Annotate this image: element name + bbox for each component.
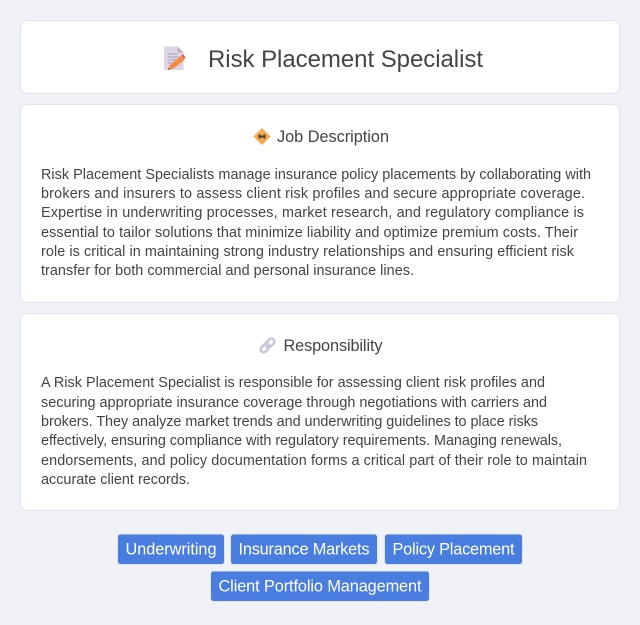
tag: Client Portfolio Management xyxy=(210,571,430,602)
heading: responsibility: Responsibility xyxy=(284,337,383,355)
icon: diamond sign xyxy=(254,128,270,145)
tag: Underwriting xyxy=(118,534,224,564)
text block: responsibility: endorsements, and policy documentation forms a critical part of their role to maintain xyxy=(41,453,587,469)
tag: Insurance Markets: Insurance Markets xyxy=(238,540,370,558)
text block: responsibility xyxy=(41,375,587,488)
text block: job description: essential to tailor solutions that minimize liability and optimize premium costs. Their xyxy=(41,225,578,241)
text block: responsibility: A Risk Placement Specialist is responsible for assessing client risk profiles and xyxy=(41,375,545,391)
panel: responsibility xyxy=(20,314,620,510)
panel: title card xyxy=(20,20,620,94)
text block: job description: Risk Placement Specialists manage insurance policy placements by collaborating with xyxy=(41,167,591,183)
text block: job description xyxy=(41,167,591,279)
text block: responsibility: effectively, ensuring compliance with regulatory requirements. Managing renewals, xyxy=(41,433,562,449)
tag: Insurance Markets xyxy=(230,534,378,564)
text block: job description: brokers and insurers to assess client risk profiles and secure appropriate coverage. xyxy=(41,186,585,202)
text block: responsibility: brokers. They analyze market trends and underwriting guidelines to place risks xyxy=(41,414,538,430)
text block: job description: role is critical in maintaining strong industry relationships and ensuring efficient risk xyxy=(41,244,575,260)
tag: Client Portfolio Management: Client Portfolio Management xyxy=(218,578,422,596)
panel: job description xyxy=(20,104,620,302)
text block: job description: Expertise in underwriting processes, market research, and regulatory compliance is xyxy=(41,205,584,221)
heading: job description: Job Description xyxy=(277,128,389,146)
text block: responsibility: securing appropriate insurance coverage through negotiations with carriers and xyxy=(41,395,547,411)
tag: Underwriting: Underwriting xyxy=(126,540,216,558)
text block: job description: transfer for both commercial and personal insurance lines. xyxy=(41,263,414,279)
title: Risk Placement Specialist xyxy=(208,46,483,73)
icon: document with pencil xyxy=(164,46,186,70)
text block: responsibility: accurate client records. xyxy=(41,472,190,488)
icon: link xyxy=(259,337,276,354)
tag: Policy Placement: Policy Placement xyxy=(392,540,515,558)
tag: Policy Placement xyxy=(384,534,522,564)
